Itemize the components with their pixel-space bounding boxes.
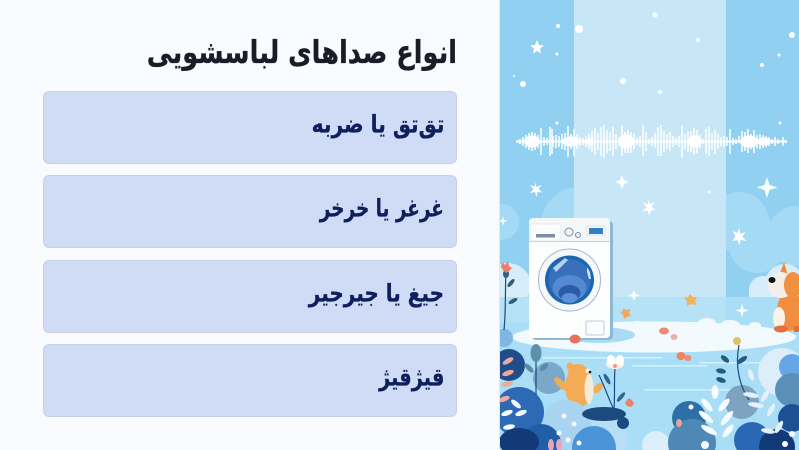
- foliage: back bushes: [493, 329, 565, 394]
- stars: [498, 12, 795, 317]
- foliage: plants: [504, 270, 749, 410]
- title: انواع صداهای لباسشویی: [147, 35, 457, 71]
- foam puddle: [512, 318, 796, 352]
- water streaks: [542, 357, 769, 390]
- foliage: pink leaves: [498, 356, 682, 450]
- washer door: [538, 249, 600, 311]
- card: knocking or banging: [43, 91, 457, 164]
- illustration: washing machine scene: [499, 0, 799, 450]
- sound waveform: [516, 125, 786, 158]
- panel: sound types list: [0, 0, 499, 450]
- card: screeching or squeaking: جیغ یا جیرجیر: [309, 278, 444, 308]
- water floor: [499, 297, 799, 450]
- icon: bear: [552, 362, 605, 407]
- card: rumbling or grinding: [43, 175, 457, 248]
- card: squealing: قیژقیژ: [379, 362, 444, 392]
- pale clouds: [483, 263, 799, 307]
- card: knocking or banging: تق‌تق یا ضربه: [311, 109, 444, 139]
- foliage: bushes: [494, 348, 799, 450]
- petals and flowers on water: [570, 294, 697, 361]
- clouds: [483, 187, 799, 273]
- icon: fox: [768, 262, 799, 332]
- card: screeching or squeaking: [43, 260, 457, 333]
- icon: washing machine: [529, 218, 613, 340]
- card: rumbling or grinding: غرغر یا خرخر: [320, 193, 444, 223]
- card: squealing: [43, 344, 457, 417]
- foliage: white ferns: [501, 369, 795, 449]
